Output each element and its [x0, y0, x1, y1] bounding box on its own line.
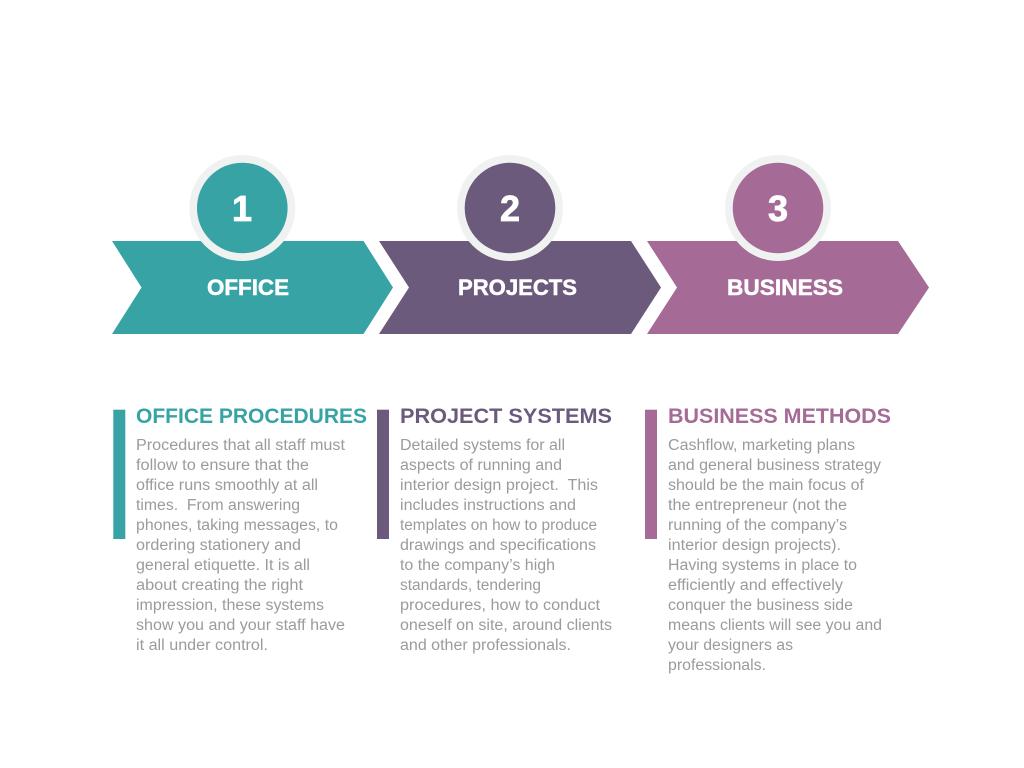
text block: project systems: aspects of running and: [400, 457, 562, 474]
panel: office procedures: [113, 404, 367, 654]
text block: project systems: to the company’s high: [400, 557, 555, 574]
text block: project systems: drawings and specifications: [400, 537, 596, 554]
panel: business methods: [645, 404, 891, 674]
text block: project systems: standards, tendering: [400, 577, 541, 594]
text block: project systems: oneself on site, around clients: [400, 617, 612, 634]
text block: office procedures: phones, taking messages, to: [136, 517, 338, 534]
number badge 2: [457, 155, 563, 261]
text block: business methods: interior design projects).: [668, 537, 841, 554]
text block: project systems: templates on how to produce: [400, 517, 597, 534]
text block: project systems: and other professionals.: [400, 637, 571, 654]
text block: office procedures: [136, 437, 346, 654]
number badge 1: 1: [232, 188, 252, 229]
text block: project systems: interior design project. This: [400, 477, 598, 494]
text block: business methods: professionals.: [668, 657, 766, 674]
text block: business methods: conquer the business side: [668, 597, 853, 614]
text block: project systems: [400, 437, 612, 654]
text block: business methods: your designers as: [668, 637, 793, 654]
text block: project systems: Detailed systems for all: [400, 437, 565, 454]
accent bar: office: [113, 410, 125, 539]
text block: business methods: and general business strategy: [668, 457, 881, 474]
text block: office procedures: follow to ensure that the: [136, 457, 309, 474]
text block: office procedures: ordering stationery and: [136, 537, 301, 554]
text block: office procedures: times. From answering: [136, 497, 300, 514]
number badge 3: [725, 155, 831, 261]
text block: business methods: running of the company’s: [668, 517, 847, 534]
text block: business methods: [668, 437, 882, 674]
number badge 3: 3: [768, 188, 788, 229]
text block: office procedures: Procedures that all staff must: [136, 437, 346, 454]
number badge 2: 2: [500, 188, 520, 229]
text block: office procedures: general etiquette. It is all: [136, 557, 310, 574]
text block: project systems: includes instructions and: [400, 497, 576, 514]
text block: business methods: efficiently and effectively: [668, 577, 843, 594]
heading: business methods: BUSINESS METHODS: [668, 404, 891, 428]
text block: business methods: Having systems in place to: [668, 557, 857, 574]
heading: project systems: PROJECT SYSTEMS: [400, 404, 612, 428]
text block: office procedures: office runs smoothly at all: [136, 477, 318, 494]
label: office: OFFICE: [207, 275, 289, 300]
label: business: BUSINESS: [727, 275, 843, 300]
text block: business methods: the entrepreneur (not the: [668, 497, 847, 514]
text block: business methods: means clients will see you and: [668, 617, 882, 634]
step 2: projects chevron: [379, 241, 661, 334]
text block: office procedures: about creating the right: [136, 577, 304, 594]
accent bar: business: [645, 410, 657, 539]
step 1: office chevron: [112, 241, 393, 334]
label: projects: PROJECTS: [458, 275, 577, 300]
text block: project systems: procedures, how to conduct: [400, 597, 601, 614]
heading: office procedures: OFFICE PROCEDURES: [136, 404, 367, 428]
text block: business methods: should be the main focus of: [668, 477, 865, 494]
text block: business methods: Cashflow, marketing plans: [668, 437, 855, 454]
text block: office procedures: it all under control.: [136, 637, 268, 654]
step 3: business chevron: [647, 241, 929, 334]
accent bar: projects: [377, 410, 389, 539]
text block: office procedures: impression, these systems: [136, 597, 324, 614]
text block: office procedures: show you and your staff have: [136, 617, 345, 634]
number badge 1: [189, 155, 295, 261]
panel: project systems: [377, 404, 612, 654]
